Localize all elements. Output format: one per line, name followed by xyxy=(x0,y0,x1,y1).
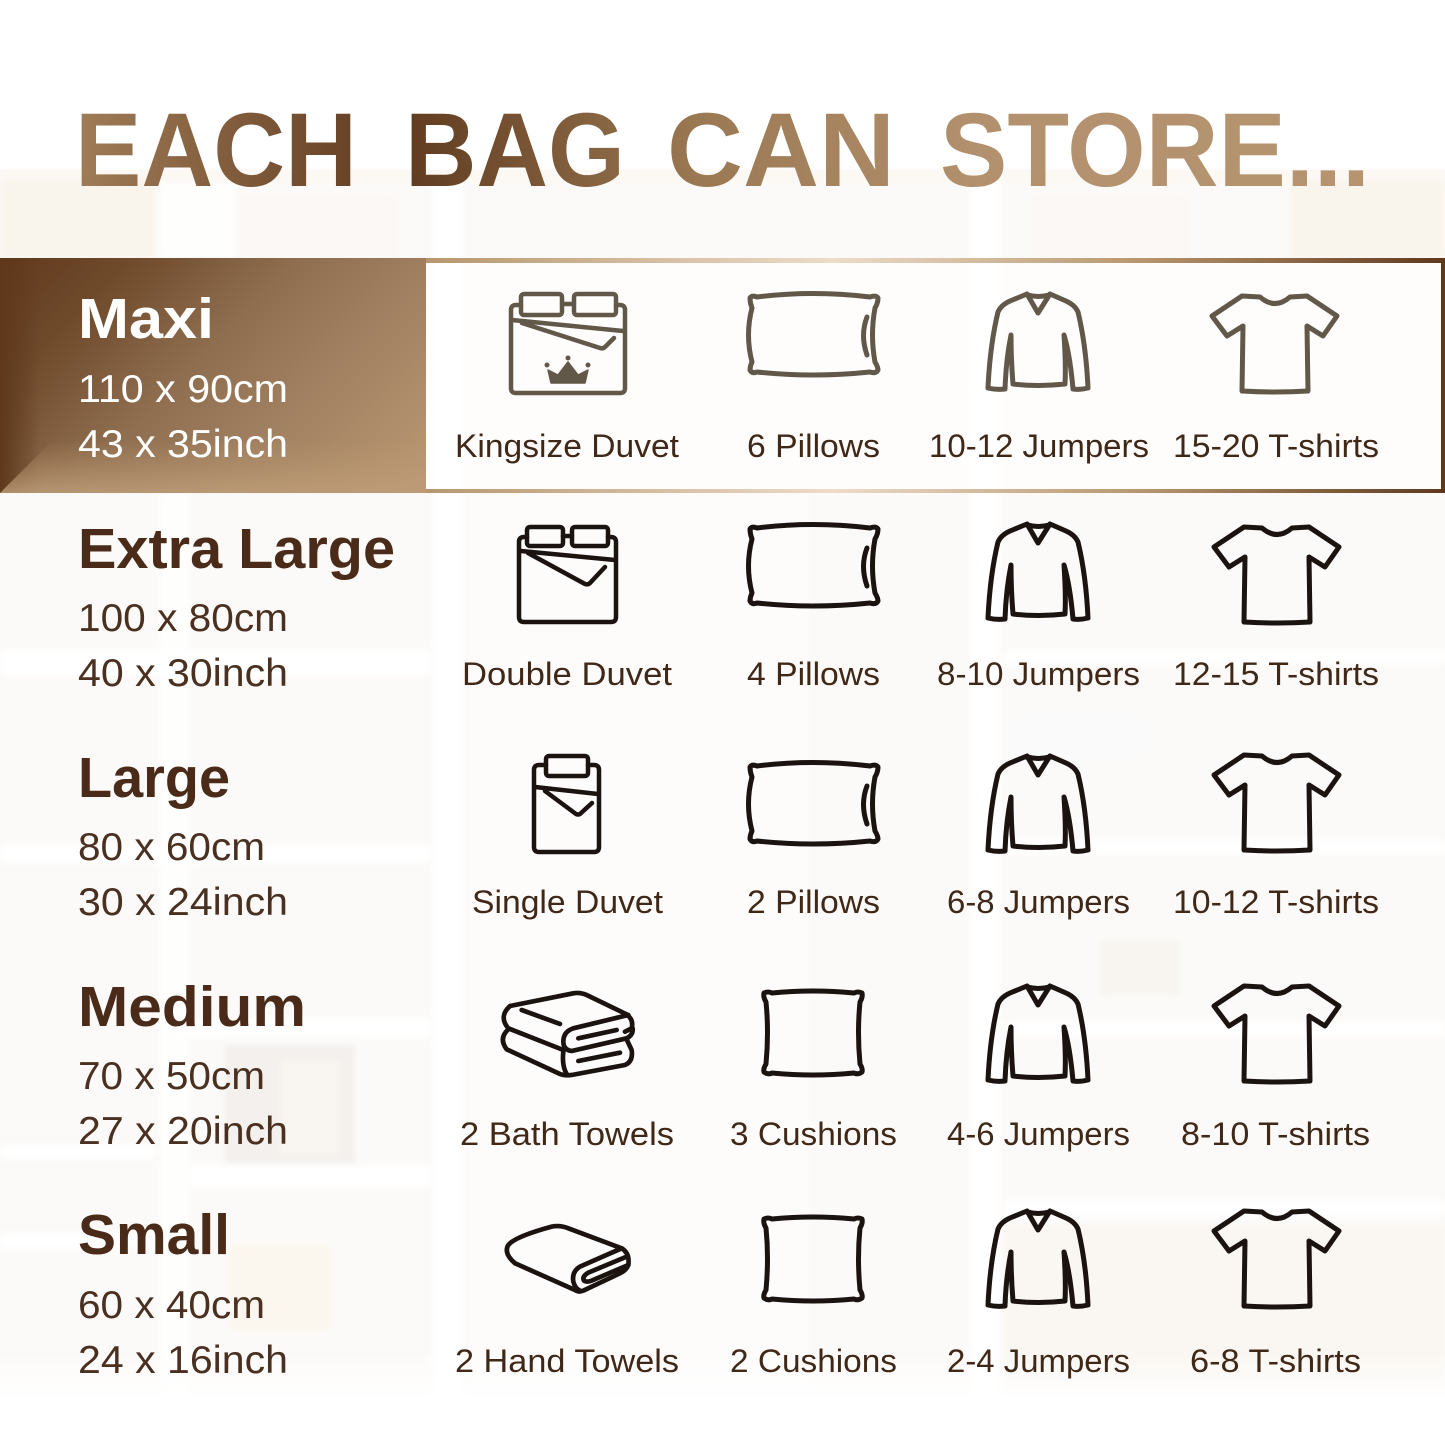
Large size text xyxy=(78,746,288,924)
Maxi capacity labels: 10-12 Jumpers xyxy=(929,428,1149,464)
Small capacity labels xyxy=(455,1343,1361,1379)
title xyxy=(75,92,1370,209)
Extra Large capacity labels: Double Duvet xyxy=(462,656,672,692)
Maxi size band xyxy=(0,258,426,493)
Maxi capacity labels: Kingsize Duvet xyxy=(455,428,679,464)
Large capacity labels: 6-8 Jumpers xyxy=(947,884,1130,920)
icon: t-shirt xyxy=(1214,755,1339,851)
Medium capacity labels: 3 Cushions xyxy=(730,1116,897,1152)
icon: t-shirt xyxy=(1214,1211,1339,1307)
Extra Large size text: Extra Large xyxy=(78,517,395,581)
Extra Large capacity labels: 4 Pillows xyxy=(747,656,880,692)
Extra Large size text: 40 x 30inch xyxy=(78,652,288,695)
icon: double bed xyxy=(519,527,616,622)
Large size text: 30 x 24inch xyxy=(78,881,288,924)
Large capacity labels: 10-12 T-shirts xyxy=(1173,884,1379,920)
Extra Large size text: 100 x 80cm xyxy=(78,597,288,640)
icon: cushion xyxy=(764,1217,862,1301)
title: EACH xyxy=(75,92,357,209)
panel: Extra Large row xyxy=(78,517,1379,695)
panel: Small row xyxy=(78,1203,1361,1382)
panel: Medium row xyxy=(78,975,1370,1153)
title: BAG xyxy=(405,92,625,209)
Small capacity labels: 2 Hand Towels xyxy=(455,1343,679,1379)
Small size text: 24 x 16inch xyxy=(78,1339,288,1382)
Maxi capacity labels xyxy=(455,428,1379,464)
icon: single bed xyxy=(534,756,599,852)
icon: cushion xyxy=(764,991,862,1075)
icon: king bed with crown xyxy=(511,294,625,393)
Extra Large size text xyxy=(78,517,395,695)
Medium capacity labels: 2 Bath Towels xyxy=(460,1116,674,1152)
panel: Large row xyxy=(78,746,1379,924)
Small capacity labels: 2-4 Jumpers xyxy=(947,1343,1130,1379)
Small capacity labels: 6-8 T-shirts xyxy=(1190,1343,1361,1379)
icon: t-shirt xyxy=(1214,986,1339,1082)
Large size text: 80 x 60cm xyxy=(78,826,265,869)
Maxi size band: 110 x 90cm xyxy=(78,368,288,411)
Large capacity labels xyxy=(472,884,1379,920)
title: STORE... xyxy=(940,92,1370,209)
Extra Large capacity labels: 12-15 T-shirts xyxy=(1173,656,1379,692)
icon: jumper xyxy=(988,986,1088,1081)
Small size text xyxy=(78,1203,288,1382)
panel: Maxi row xyxy=(0,258,1445,493)
icon: pillow xyxy=(748,294,878,375)
Medium size text: 70 x 50cm xyxy=(78,1055,265,1098)
Large size text: Large xyxy=(78,746,230,810)
icon: stacked bath towels xyxy=(503,993,633,1075)
Maxi highlighted frame xyxy=(426,258,1445,493)
icon: jumper xyxy=(988,524,1088,619)
Maxi capacity labels: 15-20 T-shirts xyxy=(1173,428,1379,464)
icon: jumper xyxy=(988,756,1088,851)
icon: jumper xyxy=(988,1211,1088,1306)
Maxi capacity labels: 6 Pillows xyxy=(747,428,880,464)
Large capacity labels: 2 Pillows xyxy=(747,884,880,920)
icon: jumper xyxy=(988,294,1088,389)
icon: pillow xyxy=(748,524,878,606)
Medium size text: 27 x 20inch xyxy=(78,1110,288,1153)
icon: folded hand towel xyxy=(507,1226,629,1291)
icon: t-shirt xyxy=(1214,527,1339,623)
title: CAN xyxy=(667,92,895,209)
Medium size text: Medium xyxy=(78,975,306,1039)
Medium capacity labels: 4-6 Jumpers xyxy=(947,1116,1130,1152)
Medium capacity labels xyxy=(460,1116,1370,1152)
Medium size text xyxy=(78,975,306,1153)
Extra Large capacity labels: 8-10 Jumpers xyxy=(937,656,1140,692)
icon: pillow xyxy=(748,762,878,844)
Maxi size band: Maxi xyxy=(78,287,214,351)
Small capacity labels: 2 Cushions xyxy=(730,1343,897,1379)
Extra Large capacity labels xyxy=(462,656,1379,692)
icon: t-shirt xyxy=(1212,296,1337,392)
Large capacity labels: Single Duvet xyxy=(472,884,663,920)
Small size text: Small xyxy=(78,1203,230,1267)
Medium capacity labels: 8-10 T-shirts xyxy=(1181,1116,1370,1152)
Small size text: 60 x 40cm xyxy=(78,1284,265,1327)
Maxi size band: 43 x 35inch xyxy=(78,423,288,466)
